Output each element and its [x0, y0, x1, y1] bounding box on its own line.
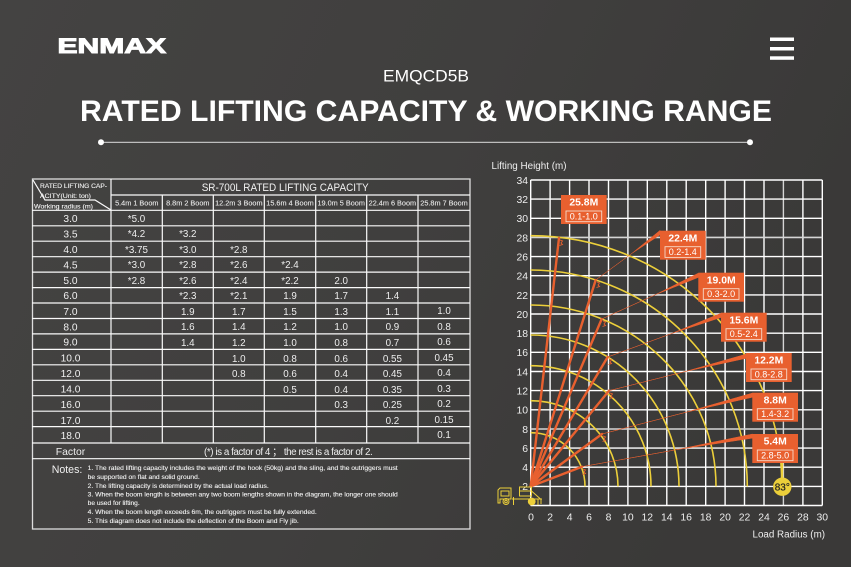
logo: ENMAX: ENMAX [58, 34, 167, 58]
notes [52, 464, 398, 525]
column: 8.8m values: 1.6 [181, 322, 195, 333]
boom hook marks [560, 240, 612, 474]
working radius column: 18.0 [61, 431, 81, 442]
column: 8.8m values: *2.3 [179, 291, 197, 302]
column: 5.4m values: *2.8 [128, 276, 146, 287]
column: 15.6m values: 0.8 [283, 354, 297, 365]
column: 15.6m values: 1.0 [283, 338, 297, 349]
table title: SR-700L RATED LIFTING CAPACITY [202, 182, 369, 194]
x axis labels: 10 [622, 512, 634, 524]
x axis labels: 2 [547, 512, 553, 524]
callout: 19.0M: 19.0M [707, 275, 736, 286]
x axis labels [528, 512, 828, 524]
column: 22.4m values: 0.55 [383, 354, 402, 365]
column: 25.8m values: 0.15 [434, 415, 454, 426]
column: 22.4m values: 0.9 [386, 322, 399, 333]
callout: 12.2M [746, 353, 792, 382]
column: 15.6m values: *2.4 [281, 260, 299, 271]
column: 25.8m values: 1.0 [437, 306, 451, 317]
model heading: EMQCD5B [383, 68, 469, 86]
title rule with end dots [98, 139, 753, 145]
callout: 25.8M: 25.8M [569, 198, 598, 209]
column headers: 25.8m 7 Boom [420, 198, 468, 208]
column headers: 8.8m 2 Boom [166, 198, 210, 208]
y axis labels: 26 [516, 252, 528, 264]
column: 19.0m values: 0.3 [334, 400, 349, 411]
callout: 22.4M [660, 231, 706, 260]
y axis labels: 28 [516, 234, 528, 244]
table corner header [34, 183, 107, 210]
column: 19.0m values: 2.0 [334, 276, 349, 287]
factor row [56, 447, 373, 458]
column headers: 5.4m 1 Boom [115, 198, 159, 208]
y axis title: Lifting Height (m) [492, 161, 566, 172]
table corner header: ACITY(Unit: ton) [40, 193, 91, 200]
callout: 15.6M [721, 313, 767, 342]
column headers: 19.0m 5 Boom [317, 198, 365, 208]
column: 8.8m values: 1.9 [181, 307, 195, 318]
column: 15.6m values: 1.5 [283, 307, 297, 318]
x axis labels: 30 [817, 512, 828, 524]
x axis labels: 8 [606, 512, 612, 524]
column: 12.2m values: *2.1 [230, 291, 248, 302]
notes: be used for lifting. [88, 500, 140, 507]
column: 25.8m values: 0.2 [437, 399, 451, 410]
column: 19.0m values: 1.0 [334, 322, 349, 333]
column: 12.2m values: 1.2 [232, 338, 246, 349]
notes: 3. When the boom length is between any two boom lengths shown in the diagram, the longer one should [88, 492, 398, 498]
column: 15.6m values: 0.6 [283, 369, 297, 380]
working radius column: 17.0 [61, 416, 81, 427]
y axis labels: 30 [516, 214, 528, 225]
callout: 19.0M: 0.3-2.0 [707, 289, 735, 299]
column: 15.6m values: 1.2 [283, 322, 297, 333]
callout: 12.2M: 0.8-2.8 [755, 370, 783, 380]
y axis labels: 24 [516, 272, 528, 282]
working radius column: 9.0 [63, 338, 78, 348]
column: 22.4m values: 0.2 [386, 416, 399, 427]
column: 12.2m values: 1.4 [232, 322, 246, 333]
column: 19.0m values: 0.4 [334, 385, 349, 396]
callout: 12.2M: 12.2M [754, 356, 783, 367]
column: 12.2m values: *2.4 [230, 276, 248, 287]
angle indicator: 83 degrees [773, 462, 792, 496]
column headers [115, 198, 468, 208]
working radius column: 12.0 [61, 369, 81, 380]
y axis labels: 14 [516, 368, 528, 378]
working radius column: 6.0 [63, 291, 78, 302]
column: 15.6m values: 0.5 [283, 385, 297, 396]
notes: 4. When the boom length exceeds 6m, the outriggers must be fully extended. [88, 509, 317, 516]
column: 5.4m values [125, 214, 148, 287]
column: 8.8m values: *2.8 [179, 260, 197, 271]
notes: 1. The rated lifting capacity includes the weight of the hook (50kg) and the sling, and the outriggers must [88, 465, 398, 472]
table grid [32, 179, 470, 529]
column: 15.6m values: *2.2 [281, 276, 299, 287]
column: 19.0m values [334, 276, 349, 411]
x axis labels: 12 [642, 512, 653, 524]
column: 25.8m values: 0.8 [437, 322, 451, 333]
column: 15.6m values [281, 260, 299, 396]
column: 5.4m values: *3.75 [125, 245, 148, 256]
column: 22.4m values: 0.7 [386, 338, 399, 349]
column: 22.4m values: 1.4 [386, 291, 400, 302]
y axis labels: 34 [516, 176, 528, 187]
column: 22.4m values: 0.45 [383, 369, 402, 380]
panel: rated lifting capacity table [32, 179, 470, 529]
working radius column [61, 214, 81, 442]
y axis labels: 18 [516, 329, 528, 340]
working radius column: 8.0 [63, 322, 78, 334]
column: 19.0m values: 0.8 [334, 338, 349, 349]
working radius column: 14.0 [61, 384, 81, 396]
callout: 25.8M [561, 195, 607, 224]
notes: 2. The lifting capacity is determined by the actual load radius. [88, 483, 269, 490]
column: 12.2m values: 1.7 [232, 307, 246, 318]
callout: 8.8M [752, 393, 798, 422]
callout: 8.8M: 1.4-3.2 [761, 409, 789, 419]
table corner header: Working radius (m) [34, 204, 93, 210]
column headers: 12.2m 3 Boom [215, 198, 263, 208]
column: 19.0m values: 0.6 [334, 354, 349, 365]
chart: working range [492, 161, 828, 540]
boom lines [531, 238, 609, 486]
callout: 5.4M: 2.8-5.0 [761, 450, 789, 460]
callout: 22.4M: 22.4M [668, 233, 697, 244]
icon: crane truck [498, 487, 542, 505]
x axis labels: 14 [661, 512, 673, 524]
column: 19.0m values: 1.3 [334, 307, 349, 318]
column: 12.2m values: 0.8 [232, 369, 246, 380]
y axis labels: 2 [522, 482, 528, 493]
x axis labels: 6 [586, 512, 592, 524]
column: 19.0m values: 1.7 [334, 291, 348, 302]
column: 5.4m values: *3.0 [128, 260, 146, 271]
y axis labels: 16 [516, 348, 528, 359]
column: 19.0m values: 0.4 [334, 369, 349, 380]
factor row: Factor [56, 447, 86, 458]
table corner header: RATED LIFTING CAP- [40, 183, 107, 190]
x axis labels: 18 [700, 512, 712, 524]
column: 25.8m values: 0.6 [437, 337, 451, 348]
callout: 5.4M: 5.4M [764, 437, 787, 448]
y axis labels: 12 [516, 386, 528, 398]
notes: 5. This diagram does not include the deflection of the Boom and Fly jib. [88, 518, 299, 525]
column: 8.8m values [179, 229, 197, 349]
working radius column: 4.0 [63, 245, 78, 256]
column: 25.8m values: 0.45 [434, 353, 454, 364]
y axis labels: 20 [516, 310, 528, 321]
column: 12.2m values [230, 245, 248, 380]
callout: 8.8M: 8.8M [764, 395, 787, 406]
y axis labels: 4 [522, 463, 528, 474]
y axis labels: 32 [516, 195, 528, 206]
working radius column: 3.0 [63, 214, 78, 225]
x axis labels: 0 [528, 512, 534, 524]
x axis labels: 4 [567, 512, 573, 524]
working radius column: 4.5 [63, 260, 78, 272]
factor row: (*) is a factor of 4 ； the rest is a factor of 2. [204, 447, 373, 458]
callout: 19.0M [698, 273, 744, 302]
working radius column: 16.0 [61, 400, 81, 411]
column: 5.4m values: *5.0 [128, 214, 146, 225]
x axis labels: 24 [758, 512, 770, 524]
column headers: 15.6m 4 Boom [266, 198, 314, 208]
column: 12.2m values: *2.8 [230, 245, 248, 256]
notes: Notes: [52, 464, 82, 476]
column: 22.4m values: 0.35 [383, 385, 402, 396]
x axis title: Load Radius (m) [752, 530, 825, 540]
callout: 15.6M: 15.6M [729, 315, 758, 326]
chart grid [531, 180, 822, 506]
x axis labels: 26 [778, 512, 789, 524]
column: 12.2m values: *2.6 [230, 260, 248, 271]
column: 8.8m values: 1.4 [181, 338, 195, 349]
boom extension lines [582, 230, 754, 467]
column headers: 22.4m 6 Boom [369, 198, 416, 208]
column: 25.8m values [434, 306, 454, 441]
working range arcs [531, 236, 782, 486]
column: 25.8m values: 0.4 [437, 368, 451, 379]
angle indicator: 83 degrees: 83° [775, 482, 790, 493]
column: 8.8m values: *2.6 [179, 276, 197, 287]
y axis labels: 6 [522, 444, 528, 455]
icon: menu [770, 38, 794, 60]
x axis labels: 22 [739, 512, 750, 524]
column: 22.4m values: 0.25 [383, 400, 402, 411]
working radius column: 7.0 [63, 307, 78, 318]
callout: 15.6M: 0.5-2.4 [730, 329, 758, 339]
column: 15.6m values: 1.9 [283, 291, 297, 302]
title: RATED LIFTING CAPACITY & WORKING RANGE [80, 95, 772, 128]
working radius column: 3.5 [63, 230, 78, 240]
x axis labels: 20 [719, 512, 731, 524]
column: 25.8m values: 0.1 [437, 430, 451, 441]
x axis labels: 28 [797, 512, 809, 524]
y axis labels: 22 [516, 291, 528, 302]
y axis labels [516, 176, 528, 493]
callout: 5.4M [752, 434, 798, 463]
working radius column: 10.0 [61, 354, 81, 364]
column: 5.4m values: *4.2 [128, 229, 145, 240]
column: 22.4m values [383, 291, 402, 427]
callout: 22.4M: 0.2-1.4 [669, 247, 697, 257]
callout: 25.8M: 0.1-1.0 [570, 212, 598, 222]
y axis labels: 8 [522, 425, 528, 436]
x axis labels: 16 [680, 512, 692, 524]
column: 8.8m values: *3.2 [179, 229, 197, 240]
working radius column: 5.0 [63, 276, 78, 287]
column: 12.2m values: 1.0 [232, 354, 246, 365]
notes: be supported on flat and solid ground. [88, 474, 200, 481]
column: 8.8m values: *3.0 [179, 245, 197, 256]
column: 22.4m values: 1.1 [386, 307, 399, 318]
column: 25.8m values: 0.3 [437, 384, 451, 395]
y axis labels: 10 [516, 406, 528, 416]
